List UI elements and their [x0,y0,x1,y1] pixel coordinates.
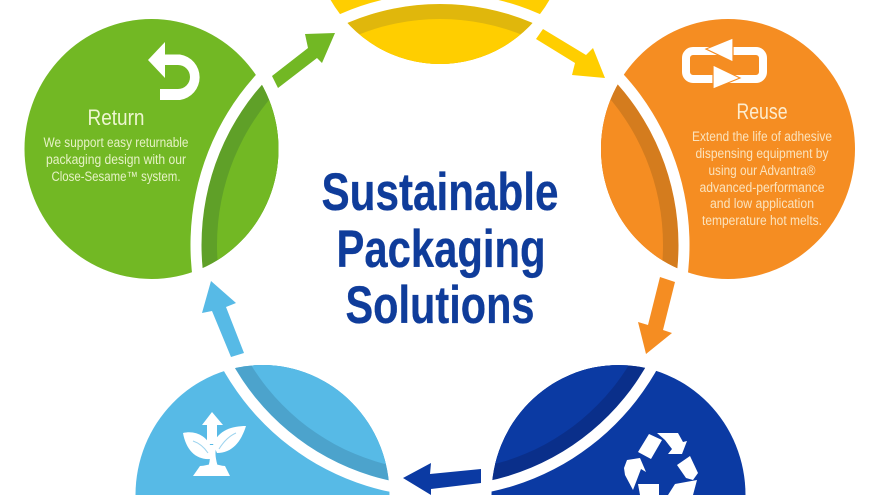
text: reuse description: and low application [710,196,814,211]
text: reuse description: Extend the life of adhesive [692,129,832,144]
text: return description: We support easy returnable [44,135,188,150]
arrow: light blue [202,281,244,357]
heading: return: Return [88,105,144,130]
text: reuse description: advanced-performance [700,180,824,195]
text: return description: Close-Sesame™ system. [52,169,180,184]
arrow: green [272,33,335,88]
text: reuse description: temperature hot melts. [702,213,822,228]
panel: return circle (green) [24,19,278,279]
icon: return arrow [148,42,200,100]
text: reuse description: using our Advantra® [708,163,816,178]
title: Solutions [346,276,534,335]
arrow: orange [638,277,675,354]
panel: reduce circle (yellow) [331,0,549,64]
arrow: yellow [536,29,605,78]
text: return description [44,135,188,184]
arrow: dark blue [403,463,481,495]
panel: recycle circle (dark blue) [492,365,746,495]
title [322,163,558,335]
heading: reuse: Reuse [736,99,788,124]
title: Sustainable [322,163,558,222]
panel: renew circle (light blue) [136,365,390,495]
text: reuse description: dispensing equipment by [696,146,829,161]
icon: reuse loop [686,38,763,89]
icon: sprout with arrow [183,412,246,476]
text: reuse description [692,129,832,228]
text: return description: packaging design with our [46,152,186,167]
title: Packaging [336,220,546,279]
icon: recycle symbol [624,433,698,495]
panel: reuse circle (orange) [601,19,855,279]
